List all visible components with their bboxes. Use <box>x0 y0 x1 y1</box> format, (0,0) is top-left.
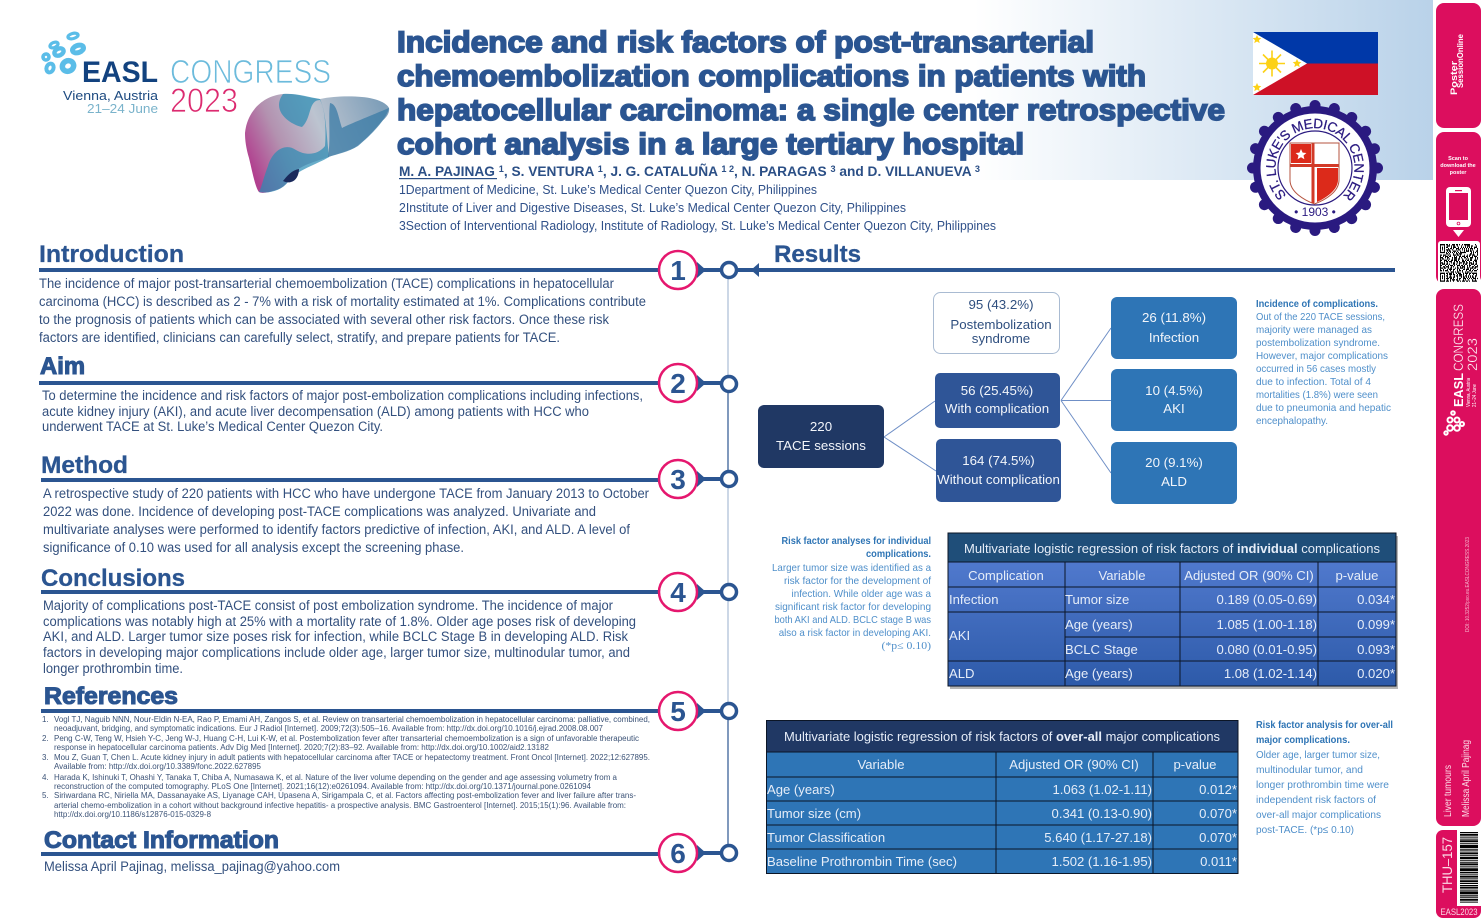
sidebar panel: poster number and barcode: THU–157 <box>1439 837 1455 893</box>
timeline node 4 <box>659 573 736 611</box>
panel: conclusions: Majority of complications post-TACE consist of post embolization syndrome. The incidence of major <box>43 598 613 613</box>
text: risk factor analysis for over-all major complications: longer prothrombin time were <box>1256 779 1389 791</box>
text: incidence of complications: majority were managed as <box>1256 324 1372 336</box>
text: risk factor analysis for over-all major complications: Risk factor analysis for over-all <box>1256 719 1393 731</box>
connectors <box>884 328 1111 473</box>
table: over-all major complications: 0.012* <box>1199 782 1237 797</box>
panel: references: 1. <box>42 715 49 724</box>
table: individual complications: Complication <box>968 568 1044 583</box>
panel: contact information: Contact Information <box>44 827 279 854</box>
EASL Congress logo: EASL <box>82 56 158 89</box>
box: ALD: 20 (9.1%) <box>1145 455 1203 470</box>
box: infection: Infection <box>1149 330 1199 345</box>
box: postembolization syndrome: Postembolization <box>950 317 1052 332</box>
authors and affiliations: M. A. PAJINAG <box>399 164 494 179</box>
panel: conclusions: complications was notably high at 25% with a mortality rate of 1.8%. Older age poses risk of developing <box>43 614 636 629</box>
timeline node 2: 2 <box>670 368 686 399</box>
table: over-all major complications: Age (years) <box>767 782 835 797</box>
text: incidence of complications: due to infection. Total of 4 <box>1256 376 1371 388</box>
sidebar panel: poster number and barcode <box>1436 830 1481 918</box>
panel: method: multivariate analyses were performed to identify factors predictive of infection, AKI, and ALD. A level of <box>43 522 630 537</box>
table: individual complications: Infection <box>949 592 998 607</box>
text: risk factor analyses for individual complications: risk factor for the development of <box>784 575 931 587</box>
text: risk factor analyses for individual complications <box>772 535 932 652</box>
table: individual complications: ALD <box>949 666 974 681</box>
panel: references <box>41 683 661 819</box>
panel: references: Available from: http://dx.doi.org/10.3389/fonc.2022.627895 <box>54 762 262 771</box>
box: infection <box>1111 297 1237 359</box>
sidebar panel: EASL Congress, DOI, author: Melissa April Pajinag <box>1461 740 1472 817</box>
box: without complication: Without complication <box>937 472 1060 487</box>
results heading <box>737 241 1395 277</box>
timeline spine <box>727 278 729 845</box>
authors and affiliations: , S. VENTURA <box>504 164 598 179</box>
box: with complication <box>935 373 1060 428</box>
QR code <box>1438 241 1480 284</box>
table: over-all major complications: 0.070* <box>1199 830 1237 845</box>
results heading: Results <box>774 241 861 268</box>
timeline node 6: 6 <box>670 838 686 869</box>
title: Incidence and risk factors of post-transarterial <box>397 26 1094 59</box>
table: individual complications: Adjusted OR (90% CI) <box>1184 568 1314 583</box>
panel: references: Siriwardana RC, Niriella MA, Dassanayake AS, Liyanage CAH, Upasena A, Sirigampala C, et al. Factors affecting post-embolization fever and liver failure after trans- <box>54 791 636 800</box>
table: over-all major complications: 1.502 (1.16-1.95) <box>1052 854 1152 869</box>
sidebar panel: scan to download: Scan to <box>1448 156 1469 162</box>
table: over-all major complications: Multivariate logistic regression of risk factors of over-all major complications <box>784 729 1220 744</box>
table: individual complications: 1.085 (1.00-1.18) <box>1217 617 1317 632</box>
table: over-all major complications: Tumor Classification <box>767 830 885 845</box>
sidebar panel: EASL Congress, DOI, author: EASL <box>1451 373 1466 407</box>
panel: references: 3. <box>42 753 49 762</box>
icon: hexagon cluster <box>42 32 85 73</box>
panel: method: significance of 0.10 was used for all analysis except the screening phase. <box>43 540 464 555</box>
sidebar panel: poster session online: SessionOnline <box>1456 33 1465 88</box>
panel: references: Mou Z, Guan T, Chen L. Acute kidney injury in adult patients with hepatocellular carcinoma after TACE or hepatectomy treatment. Front Oncol [Internet]. 2022;12:627895. <box>54 753 650 762</box>
timeline node 5: 5 <box>670 696 686 727</box>
text: incidence of complications: occurred in 56 cases mostly <box>1256 363 1377 375</box>
table: individual complications: 0.080 (0.01-0.95) <box>1217 642 1317 657</box>
text: risk factor analyses for individual complications: infection. While older age was a <box>792 588 931 600</box>
timeline node 1 <box>659 251 736 289</box>
box: 220 TACE sessions: 220 <box>810 419 832 434</box>
table: over-all major complications: Baseline Prothrombin Time (sec) <box>767 854 957 869</box>
authors and affiliations: 1Department of Medicine, St. Luke’s Medical Center Quezon City, Philippines <box>399 183 817 197</box>
sidebar panel: poster session online: Poster <box>1449 60 1459 95</box>
panel: method <box>41 452 661 555</box>
timeline node 5 <box>659 692 736 730</box>
box: postembolization syndrome: syndrome <box>972 331 1030 346</box>
box: without complication <box>936 439 1061 502</box>
authors and affiliations: 1 <box>499 164 504 174</box>
panel: references: 2. <box>42 734 49 743</box>
table: individual complications <box>948 533 1398 689</box>
timeline node 6 <box>659 834 736 872</box>
EASL Congress logo: 2023 <box>170 82 238 120</box>
text: risk factor analyses for individual complications: (*p≤ 0.10) <box>882 641 932 652</box>
timeline node 3 <box>659 460 736 498</box>
text: risk factor analysis for over-all major complications: Older age, larger tumor size, <box>1256 749 1380 761</box>
box: 220 TACE sessions: TACE sessions <box>776 438 866 453</box>
text: risk factor analysis for over-all major complications <box>1256 719 1393 836</box>
table: individual complications: p-value <box>1336 568 1378 583</box>
box: ALD: ALD <box>1161 474 1187 489</box>
text: incidence of complications: mortalities (1.8%) were seen <box>1256 389 1378 401</box>
authors and affiliations: 2Institute of Liver and Digestive Diseases, St. Luke’s Medical Center Quezon City, Philippines <box>399 201 906 215</box>
panel: references: Harada K, Ishinuki T, Ohashi Y, Tanaka T, Chiba A, Numasawa K, et al. Nature of the liver volume depending on the gender and age assessing volumetry from a <box>54 773 618 782</box>
table: individual complications: Multivariate logistic regression of risk factors of individual complications <box>964 541 1380 556</box>
panel: introduction: The incidence of major post-transarterial chemoembolization (TACE) complications in hepatocellular <box>39 276 614 291</box>
table: individual complications: BCLC Stage <box>1065 642 1138 657</box>
timeline node 3: 3 <box>670 464 686 495</box>
authors and affiliations: 1 <box>598 164 603 174</box>
box: postembolization syndrome <box>934 292 1060 354</box>
timeline node 4: 4 <box>670 577 686 608</box>
text: risk factor analysis for over-all major complications: over-all major complications <box>1256 809 1381 821</box>
table: individual complications: 0.020* <box>1357 666 1395 681</box>
box: postembolization syndrome: 95 (43.2%) <box>968 297 1034 312</box>
panel: references: reconstruction of the computed tomography. PLoS One [Internet]. 2021;16(12):e0261094. Available from: http://dx.doi.org/10.1371/journal.pone.0261094 <box>54 782 592 791</box>
icon: small hexagons <box>1444 411 1464 435</box>
sidebar panel: scan to download <box>1436 132 1481 284</box>
panel: introduction <box>39 241 661 345</box>
text: risk factor analyses for individual complications: Larger tumor size was identified as a <box>772 562 931 574</box>
box: AKI: AKI <box>1163 401 1185 416</box>
authors and affiliations <box>399 164 996 233</box>
text: risk factor analyses for individual complications: both AKI and ALD. BCLC stage B was <box>774 614 931 626</box>
table: individual complications: 0.093* <box>1357 642 1395 657</box>
table: over-all major complications: Variable <box>857 757 905 772</box>
sidebar panel: EASL Congress, DOI, author: 21–24 June <box>1472 384 1478 407</box>
panel: references: neoadjuvant, bridging, and symptomatic indications. Eur J Radiol [Internet]. 2009;72(3):505–16. Available from: http://dx.doi.org/10.1016/j.ejrad.2008.08.007 <box>54 724 604 733</box>
icon: St. Luke's Medical Center seal: ST. LUKE'S MEDICAL CENTER <box>1266 118 1364 200</box>
panel: method: 2022 was done. Incidence of developing post-TACE complications was analyzed. Univariate and <box>43 504 596 519</box>
panel: references: response in hepatocellular carcinoma patients. Adv Dig Med [Internet]. 2020;7(2):83–92. Available from: http://dx.doi.org/10.1002/aid2.13182 <box>54 743 550 752</box>
icon: St. Luke's Medical Center seal: • 1903 • <box>1294 205 1336 219</box>
table: over-all major complications: 0.341 (0.13-0.90) <box>1052 806 1152 821</box>
table: individual complications: Age (years) <box>1065 617 1133 632</box>
table: individual complications: 0.034* <box>1357 592 1395 607</box>
box: with complication: 56 (25.45%) <box>961 383 1033 398</box>
box: ALD <box>1111 442 1237 504</box>
sidebar panel: EASL Congress, DOI, author: DOI: 10.3252/pso.eu.EASLCONGRESS.2023 <box>1465 537 1471 632</box>
text: risk factor analyses for individual complications: complications. <box>866 548 931 560</box>
panel: contact information <box>41 827 661 874</box>
text: incidence of complications: encephalopathy. <box>1256 415 1328 427</box>
sidebar panel: EASL Congress, DOI, author: Vienna, Austria <box>1466 377 1472 407</box>
authors and affiliations: 3 <box>975 164 980 174</box>
panel: conclusions: longer prothrombin time. <box>43 661 183 676</box>
panel: introduction: carcinoma (HCC) is described as 2 - 7% with a risk of mortality estimated at 1%. Complications contribute <box>39 294 646 309</box>
panel: aim: underwent TACE at St. Luke’s Medical Center Quezon City. <box>42 419 383 434</box>
sidebar panel: EASL Congress, DOI, author <box>1436 289 1481 826</box>
panel: introduction: Introduction <box>39 241 184 268</box>
panel: conclusions: AKI, and ALD. Larger tumor size poses risk for infection, while BCLC Stage B in developing ALD. Risk <box>43 629 628 644</box>
text: risk factor analysis for over-all major complications: major complications. <box>1256 734 1350 746</box>
title: chemoembolization complications in patients with <box>397 60 1146 93</box>
text: risk factor analysis for over-all major complications: independent risk factors of <box>1256 794 1376 806</box>
icon: St. Luke's Medical Center seal <box>1247 100 1383 236</box>
sidebar panel: EASL Congress, DOI, author: Liver tumours <box>1443 765 1454 817</box>
sidebar panel: scan to download: download the <box>1440 163 1476 169</box>
authors and affiliations: and D. VILLANUEVA <box>836 164 975 179</box>
table: individual complications: AKI <box>949 628 970 643</box>
barcode <box>1460 832 1478 903</box>
timeline node 2 <box>659 364 736 402</box>
table: individual complications: 1.08 (1.02-1.14) <box>1224 666 1317 681</box>
panel: aim: To determine the incidence and risk factors of major post-embolization complications including infections, <box>42 388 643 403</box>
table: over-all major complications: 0.070* <box>1199 806 1237 821</box>
text: incidence of complications: Out of the 220 TACE sessions, <box>1256 311 1385 323</box>
panel: references: 4. <box>42 773 49 782</box>
authors and affiliations: 3Section of Interventional Radiology, Institute of Radiology, St. Luke’s Medical Center Quezon City, Philippines <box>399 219 996 233</box>
authors and affiliations: , J. G. CATALUÑA <box>603 164 721 179</box>
sidebar panel: scan to download: poster <box>1450 170 1467 176</box>
table: over-all major complications: 5.640 (1.17-27.18) <box>1044 830 1152 845</box>
panel: references: http://dx.doi.org/10.1186/s12876-015-0329-8 <box>54 810 212 819</box>
text: risk factor analyses for individual complications: Risk factor analyses for individual <box>782 535 931 547</box>
panel: references: 5. <box>42 791 49 800</box>
text: risk factor analysis for over-all major complications: post-TACE. (*p≤ 0.10) <box>1256 824 1354 836</box>
table: over-all major complications: 1.063 (1.02-1.11) <box>1053 782 1152 797</box>
table: individual complications: Variable <box>1098 568 1146 583</box>
panel: method: Method <box>41 452 128 479</box>
sidebar panel: poster number and barcode: EASL2023 <box>1440 907 1478 917</box>
panel: method: A retrospective study of 220 patients with HCC who have undergone TACE from January 2013 to October <box>43 486 649 501</box>
sidebar panel: EASL Congress, DOI, author: 2023 <box>1464 338 1480 371</box>
header gradient band <box>0 0 1433 180</box>
table: over-all major complications: 0.011* <box>1200 854 1237 869</box>
table: over-all major complications: p-value <box>1174 757 1216 772</box>
panel: aim <box>39 353 661 434</box>
EASL Congress logo: 21–24 June <box>87 101 158 116</box>
panel: conclusions <box>41 565 661 676</box>
panel: references: Peng C-W, Teng W, Hsieh Y-C, Jeng W-J, Huang C-H, Lui K-W, et al. Postembolization fever after transarterial chemoembolization is a sign of unfavorable therapeutic <box>54 734 639 743</box>
icon: Philippine flag <box>1253 32 1378 95</box>
text: incidence of complications: However, major complications <box>1256 350 1388 362</box>
text: incidence of complications: postembolization syndrome. <box>1256 337 1380 349</box>
text: incidence of complications: due to pneumonia and hepatic <box>1256 402 1391 414</box>
box: 220 TACE sessions <box>758 405 884 468</box>
box: AKI: 10 (4.5%) <box>1145 383 1203 398</box>
box: AKI <box>1111 369 1237 431</box>
icon: phone <box>1446 187 1471 237</box>
panel: references: References <box>44 683 178 710</box>
EASL Congress logo: CONGRESS <box>170 53 331 90</box>
EASL Congress logo: Vienna, Austria <box>63 88 159 103</box>
table: individual complications: Age (years) <box>1065 666 1133 681</box>
flow chart: TACE sessions <box>758 292 1237 504</box>
timeline node 1: 1 <box>670 255 686 286</box>
box: with complication: With complication <box>945 401 1049 416</box>
authors and affiliations: 3 <box>830 164 836 174</box>
authors and affiliations: 1 2 <box>721 164 734 174</box>
title <box>397 26 1225 161</box>
panel: conclusions: factors in developing major complications include older age, larger tumor size, multinodular tumor, and <box>43 645 630 660</box>
EASL Congress logo <box>42 32 331 120</box>
sidebar panel: EASL Congress, DOI, author: CONGRESS <box>1450 304 1466 371</box>
table: individual complications: 0.099* <box>1357 617 1395 632</box>
table: individual complications: 0.189 (0.05-0.69) <box>1217 592 1317 607</box>
panel: conclusions: Conclusions <box>41 565 185 592</box>
table: over-all major complications <box>766 720 1238 874</box>
sidebar panel: poster session online <box>1436 3 1481 128</box>
text: incidence of complications: Incidence of complications. <box>1256 298 1378 310</box>
box: without complication: 164 (74.5%) <box>962 453 1035 468</box>
panel: contact information: Melissa April Pajinag, melissa_pajinag@yahoo.com <box>44 859 340 874</box>
text: risk factor analysis for over-all major complications: multinodular tumor, and <box>1256 764 1363 776</box>
panel: references: Vogl TJ, Naguib NNN, Nour-Eldin N-EA, Rao P, Emami AH, Zangos S, et al. Review on transarterial chemoembolization in hepatocellular carcinoma: palliative, combined, <box>54 715 650 724</box>
text: incidence of complications <box>1256 298 1391 427</box>
icon: liver <box>245 94 389 193</box>
table: over-all major complications: Tumor size (cm) <box>767 806 861 821</box>
panel: introduction: factors are identified, clinicians can carefully select, stratify, and prepare patients for TACE. <box>39 330 560 345</box>
text: risk factor analyses for individual complications: significant risk factor for developing <box>775 601 931 613</box>
table: over-all major complications: Adjusted OR (90% CI) <box>1009 757 1139 772</box>
panel: references: arterial chemo-embolization in a cohort without background infective hepatitis- a prospective analysis. BMC Gastroenterol [Internet]. 2015;15(1):96. Available from: <box>54 801 626 810</box>
text: risk factor analyses for individual complications: also a risk factor in developing AKI. <box>779 627 931 639</box>
title: cohort analysis in a large tertiary hospital <box>397 128 1024 161</box>
panel: aim: acute kidney injury (AKI), and acute liver decompensation (ALD) among patients with HCC who <box>42 404 589 419</box>
authors and affiliations: , N. PARAGAS <box>734 164 830 179</box>
table: individual complications: Tumor size <box>1065 592 1129 607</box>
box: infection: 26 (11.8%) <box>1142 310 1206 325</box>
title: hepatocellular carcinoma: a single center retrospective <box>397 94 1225 127</box>
panel: introduction: to the prognosis of patients which can be associated with several other risk factors. Once these risk <box>39 312 609 327</box>
panel: aim: Aim <box>40 353 85 380</box>
